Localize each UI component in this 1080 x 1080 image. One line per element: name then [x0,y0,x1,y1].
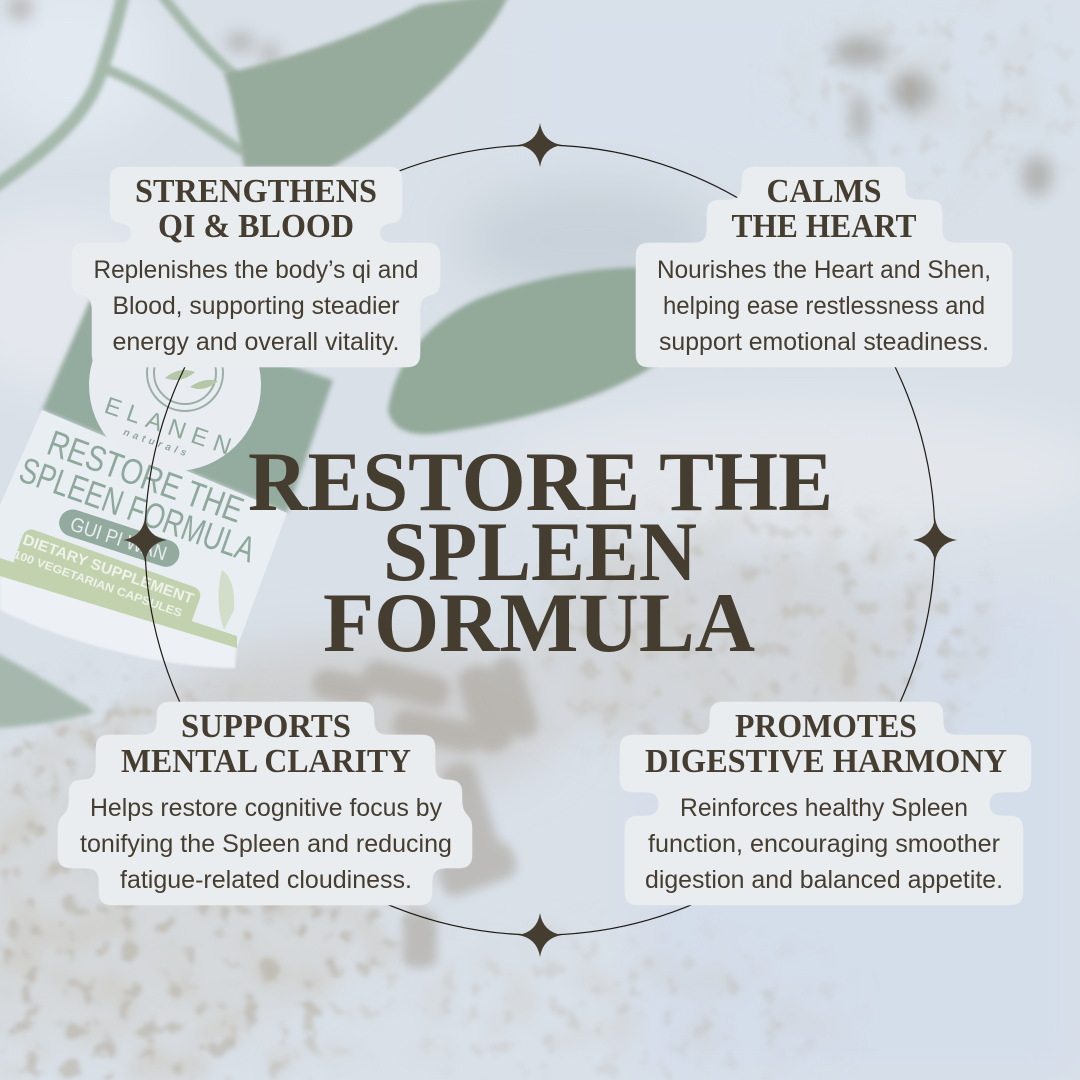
text block: Replenishes the body’s qi and [94,256,418,284]
text block [657,256,991,356]
text block: fatigue-related cloudiness. [120,866,412,894]
leaf: top [224,0,510,168]
text block [80,794,452,894]
star: top [518,123,562,167]
text block: energy and overall vitality. [112,328,400,356]
text block: helping ease restlessness and [663,292,985,320]
leaf: lower left [0,650,95,728]
text block: support emotional steadiness. [659,328,989,356]
product bottle [0,299,333,668]
heading [732,173,916,245]
heading: THE HEART [732,208,916,245]
bottle label: ELANEN [101,392,235,461]
capsules [310,652,542,968]
blurred specks: top right [8,0,1052,196]
heading [135,173,377,245]
decorative circle with stars [123,123,957,957]
leaf stems [0,0,240,190]
text block: Blood, supporting steadier [112,292,400,320]
text block: digestion and balanced appetite. [645,866,1003,894]
bottle label: 100 VEGETARIAN CAPSULES [12,549,184,620]
text block: Helps restore cognitive focus by [90,794,442,822]
bottle label: SPLEEN FORMULA [14,449,261,570]
bottle label: RESTORE THE [42,422,249,531]
panel: supports mental clarity [58,702,472,905]
heading: PROMOTES [735,708,917,745]
heading: QI & BLOOD [158,208,354,245]
heading: MENTAL CLARITY [121,743,411,780]
bottle label: GUI PI WAN [67,514,169,565]
panel: strengthens qi and blood [72,167,440,367]
text block: Nourishes the Heart and Shen, [657,256,991,284]
text block: function, encouraging smoother [648,830,1000,858]
panel: promotes digestive harmony [620,702,1031,905]
star: bottom [518,913,562,957]
text block [94,256,418,356]
title: SPLEEN [383,505,697,599]
heading: DIGESTIVE HARMONY [645,743,1007,780]
panel: calms the heart [636,167,1012,367]
star: right [913,518,957,562]
star: left [123,518,167,562]
bottle label: DIETARY SUPPLEMENT [21,531,196,608]
text block: Reinforces healthy Spleen [680,794,968,822]
bottle label [0,299,287,648]
title [248,435,833,670]
heading: STRENGTHENS [135,173,377,210]
bottle label: naturals [122,427,188,459]
text block [645,794,1003,894]
heading [645,708,1007,780]
heading: CALMS [766,173,882,210]
heading: SUPPORTS [181,708,351,745]
text block: tonifying the Spleen and reducing [80,830,452,858]
heading [121,708,411,780]
title: FORMULA [323,576,755,670]
leaf: centre [388,267,663,434]
title: RESTORE THE [248,435,833,529]
